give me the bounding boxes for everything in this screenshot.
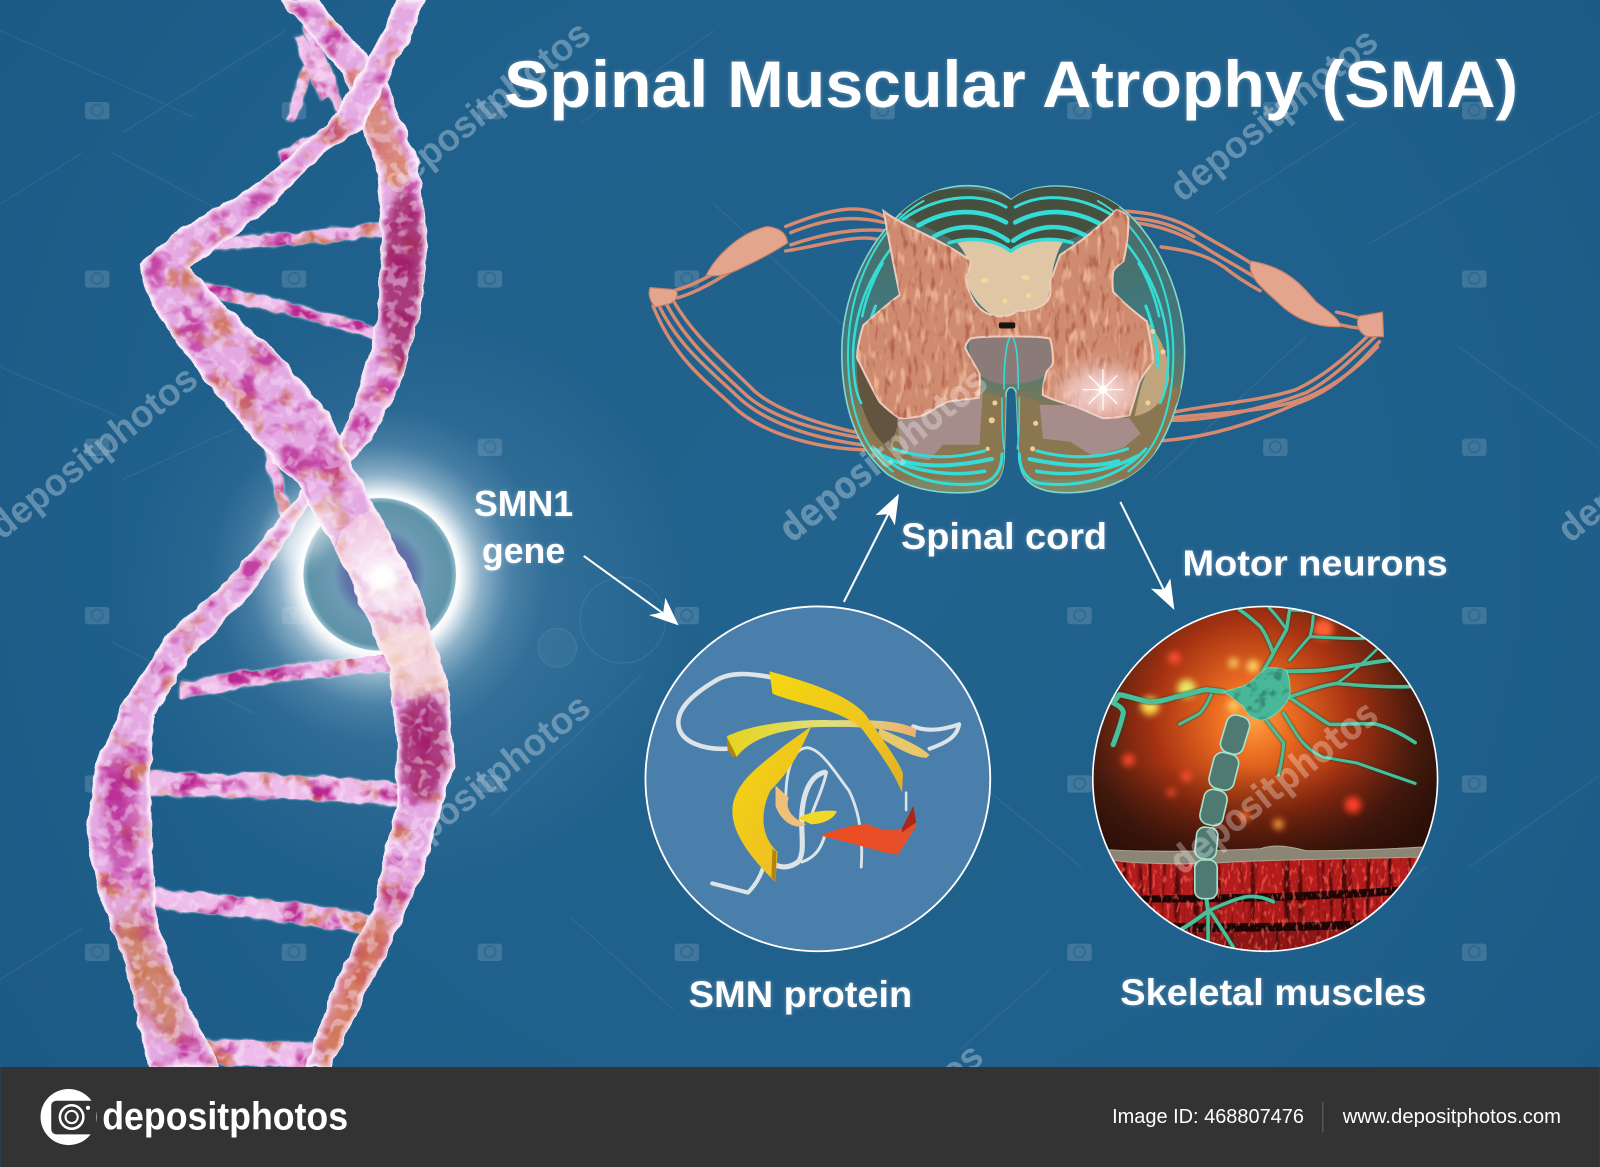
glowing spots [1122,619,1361,829]
circle background [645,606,990,951]
image id: Image ID: 468807476 [1112,1106,1304,1128]
light flare over the gene [258,484,393,589]
title: Spinal Muscular Atrophy (SMA) [504,48,1518,122]
watermark text: depositphotos [374,685,598,875]
website: www.depositphotos.com [1342,1106,1561,1128]
label: SMN protein: SMN protein [689,974,912,1015]
watermark over spinal cord: depositphotos [770,359,995,551]
protein beta sheets [727,671,930,882]
SMN1 gene disc [302,497,457,652]
label: skeletal muscles: Skeletal muscles [1120,972,1426,1013]
watermark text: depositphotos [374,12,598,202]
label: spinal cord: Spinal cord [901,516,1107,557]
panel: SMN protein circle [645,606,990,951]
DNA base pair rungs [149,24,398,1068]
panel: motor neuron and skeletal muscle circle [1092,606,1439,959]
cord body [842,186,1185,493]
nerve roots [649,209,1384,450]
logo wordmark: depositphotos [102,1095,348,1138]
watermark over neuron circle: depositphotos [1161,691,1386,883]
watermark text: depositphotos [1161,19,1386,209]
arrow: spinal cord to motor neurons [1120,502,1174,610]
back DNA strand [82,0,439,1067]
watermark camera icons [85,102,1487,961]
dark lower vignette [1103,771,1402,851]
myelinated axon [1194,713,1252,899]
lens flare decoration [538,577,665,667]
front DNA strand [140,0,456,1068]
logo icon [41,1089,97,1145]
starburst on motor neuron [1083,369,1123,410]
grey matter butterfly [852,204,1163,423]
label: SMN1 gene: SMN1 [474,484,573,524]
dorsal root ganglia and junction tips [649,226,1384,337]
protein coil loops [678,674,959,893]
label: SMN1 gene: gene [482,531,565,571]
neuron dendrites [1113,608,1415,948]
background glow [1093,606,1438,951]
left and right root bundles [653,209,1379,450]
glow around SMN1 gene [123,316,694,887]
cyan nerve fibres [848,198,1173,485]
arrow: SMN protein to spinal cord [844,494,899,602]
footer bar [0,1067,1600,1167]
muscle fibres [1108,846,1423,950]
circle outline [1093,606,1438,951]
panel: DNA double helix with SMN1 gene highlight [86,0,619,1068]
neuron cell body [1222,667,1291,720]
label: motor neurons: Motor neurons [1183,543,1448,583]
white matter regions [857,187,1184,479]
yellow specks [981,275,1166,451]
arrow: SMN1 gene to SMN protein [584,556,679,625]
panel: spinal cord cross-section [649,186,1384,493]
